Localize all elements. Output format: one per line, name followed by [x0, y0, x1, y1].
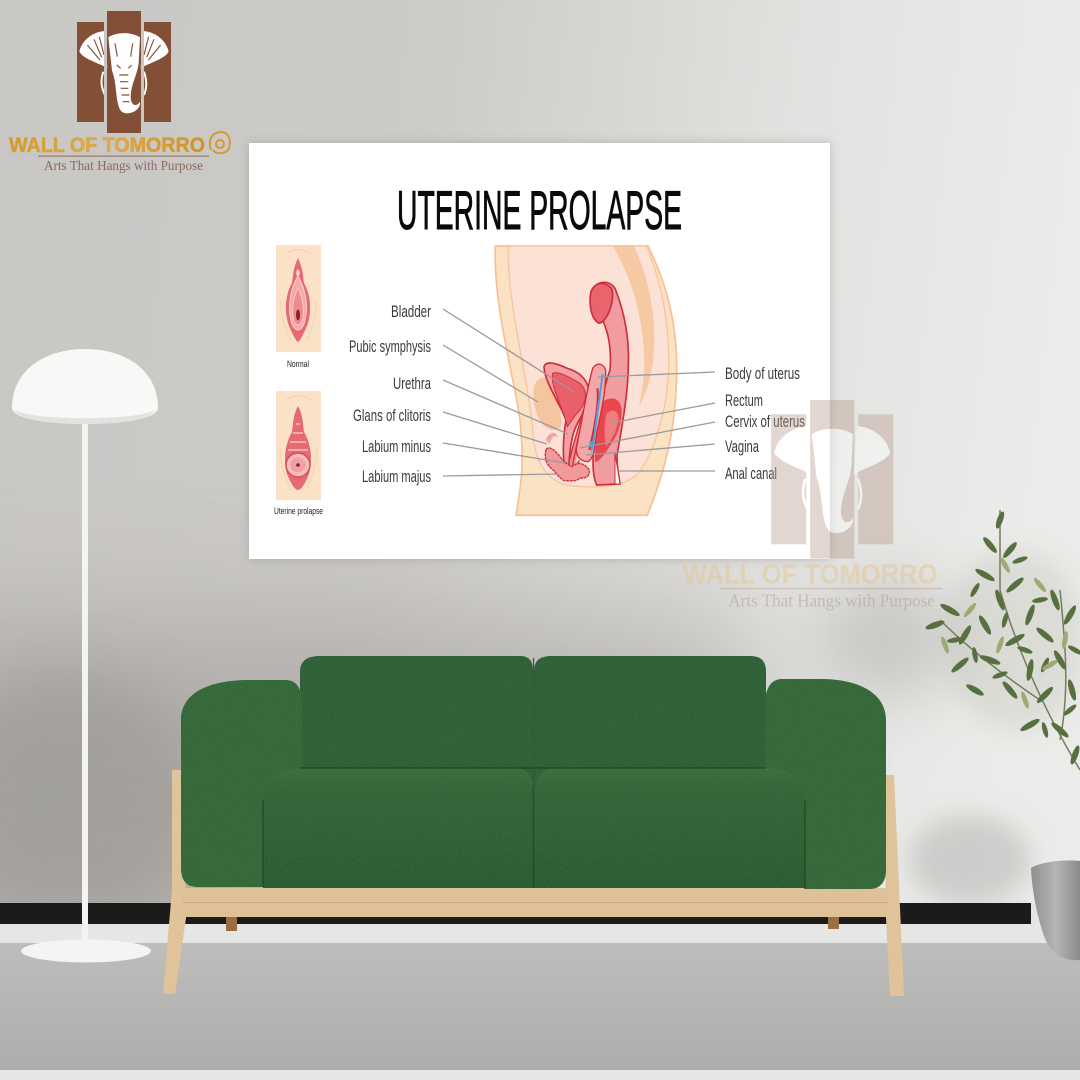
plant: [925, 510, 1080, 770]
left labels: Glans of clitoris: [353, 406, 431, 425]
body tissue: [495, 246, 677, 515]
plant pot: [1031, 861, 1080, 960]
plant stems: [940, 510, 1080, 770]
sofa upholstery: [181, 656, 886, 889]
rectum lumen: [595, 398, 622, 462]
colon opening: [590, 283, 613, 323]
sofa wooden frame: [163, 770, 904, 996]
right labels: Body of uterus: [725, 364, 800, 383]
left labels: [349, 302, 431, 486]
thumbnail: normal: [276, 245, 321, 352]
urethra and vaginal folds: [568, 390, 595, 472]
watermark logo: [683, 400, 943, 611]
left labels: Bladder: [391, 302, 431, 321]
thumbnail caption: normal: Normal: [287, 359, 309, 370]
right labels: Anal canal: [725, 464, 777, 483]
vaginal wall: [569, 390, 595, 473]
left labels: Labium majus: [362, 467, 431, 486]
logo top left: [9, 11, 230, 173]
labia: [545, 448, 589, 481]
poster panel: [249, 143, 830, 559]
bladder interior: [552, 373, 585, 427]
back cushion left: [300, 656, 533, 790]
left arm: [181, 680, 302, 887]
right labels: Cervix of uterus: [725, 412, 805, 431]
thumbnail: uterine prolapse: [276, 391, 321, 500]
poster title: UTERINE PROLAPSE: [397, 179, 682, 241]
prolapsed uterus: [576, 364, 606, 462]
anatomy cross-section diagram: [495, 246, 677, 515]
pelvic cavity: [508, 246, 669, 487]
bladder: [544, 363, 590, 473]
left labels: Pubic symphysis: [349, 337, 431, 356]
back cushion right: [534, 656, 766, 790]
right labels: [725, 364, 805, 483]
bar gaps: [104, 22, 144, 122]
leader lines: [443, 309, 715, 476]
cushion seams: [263, 658, 805, 889]
logo swirl: [210, 132, 230, 153]
seat cushion right: [534, 768, 805, 888]
right arm: [765, 679, 886, 889]
floor with baseboard and rug: [0, 903, 1080, 1080]
sofa: [163, 656, 904, 996]
pubic symphysis: [533, 377, 561, 430]
watermark wordmark: WALL OF TOMORRO: [683, 558, 937, 589]
rectum and colon: [590, 282, 628, 485]
right labels: Rectum: [725, 391, 763, 410]
left labels: Urethra: [393, 374, 431, 393]
prolapse direction arrow: [593, 374, 603, 443]
clitoris: [547, 434, 557, 443]
watermark elephant: [774, 426, 890, 533]
plant foliage: [925, 511, 1080, 765]
floor lamp: [12, 349, 158, 962]
thumbnail caption: uterine prolapse: Uterine prolapse: [274, 506, 323, 517]
elephant emblem: [79, 31, 169, 113]
logo rule and tagline: Arts That Hangs with Purpose: [44, 158, 203, 173]
watermark tagline: Arts That Hangs with Purpose: [728, 591, 935, 611]
plant soft shadow mass: [945, 550, 1080, 730]
watermark bars: [771, 400, 893, 559]
anal canal: [615, 453, 620, 484]
logo bars: [77, 11, 171, 133]
left labels: Labium minus: [362, 437, 431, 456]
logo wordmark: WALL OF TOMORRO: [9, 134, 205, 157]
seat cushion left: [263, 768, 534, 888]
right labels: Vagina: [725, 437, 759, 456]
sacrum band: [613, 246, 654, 407]
